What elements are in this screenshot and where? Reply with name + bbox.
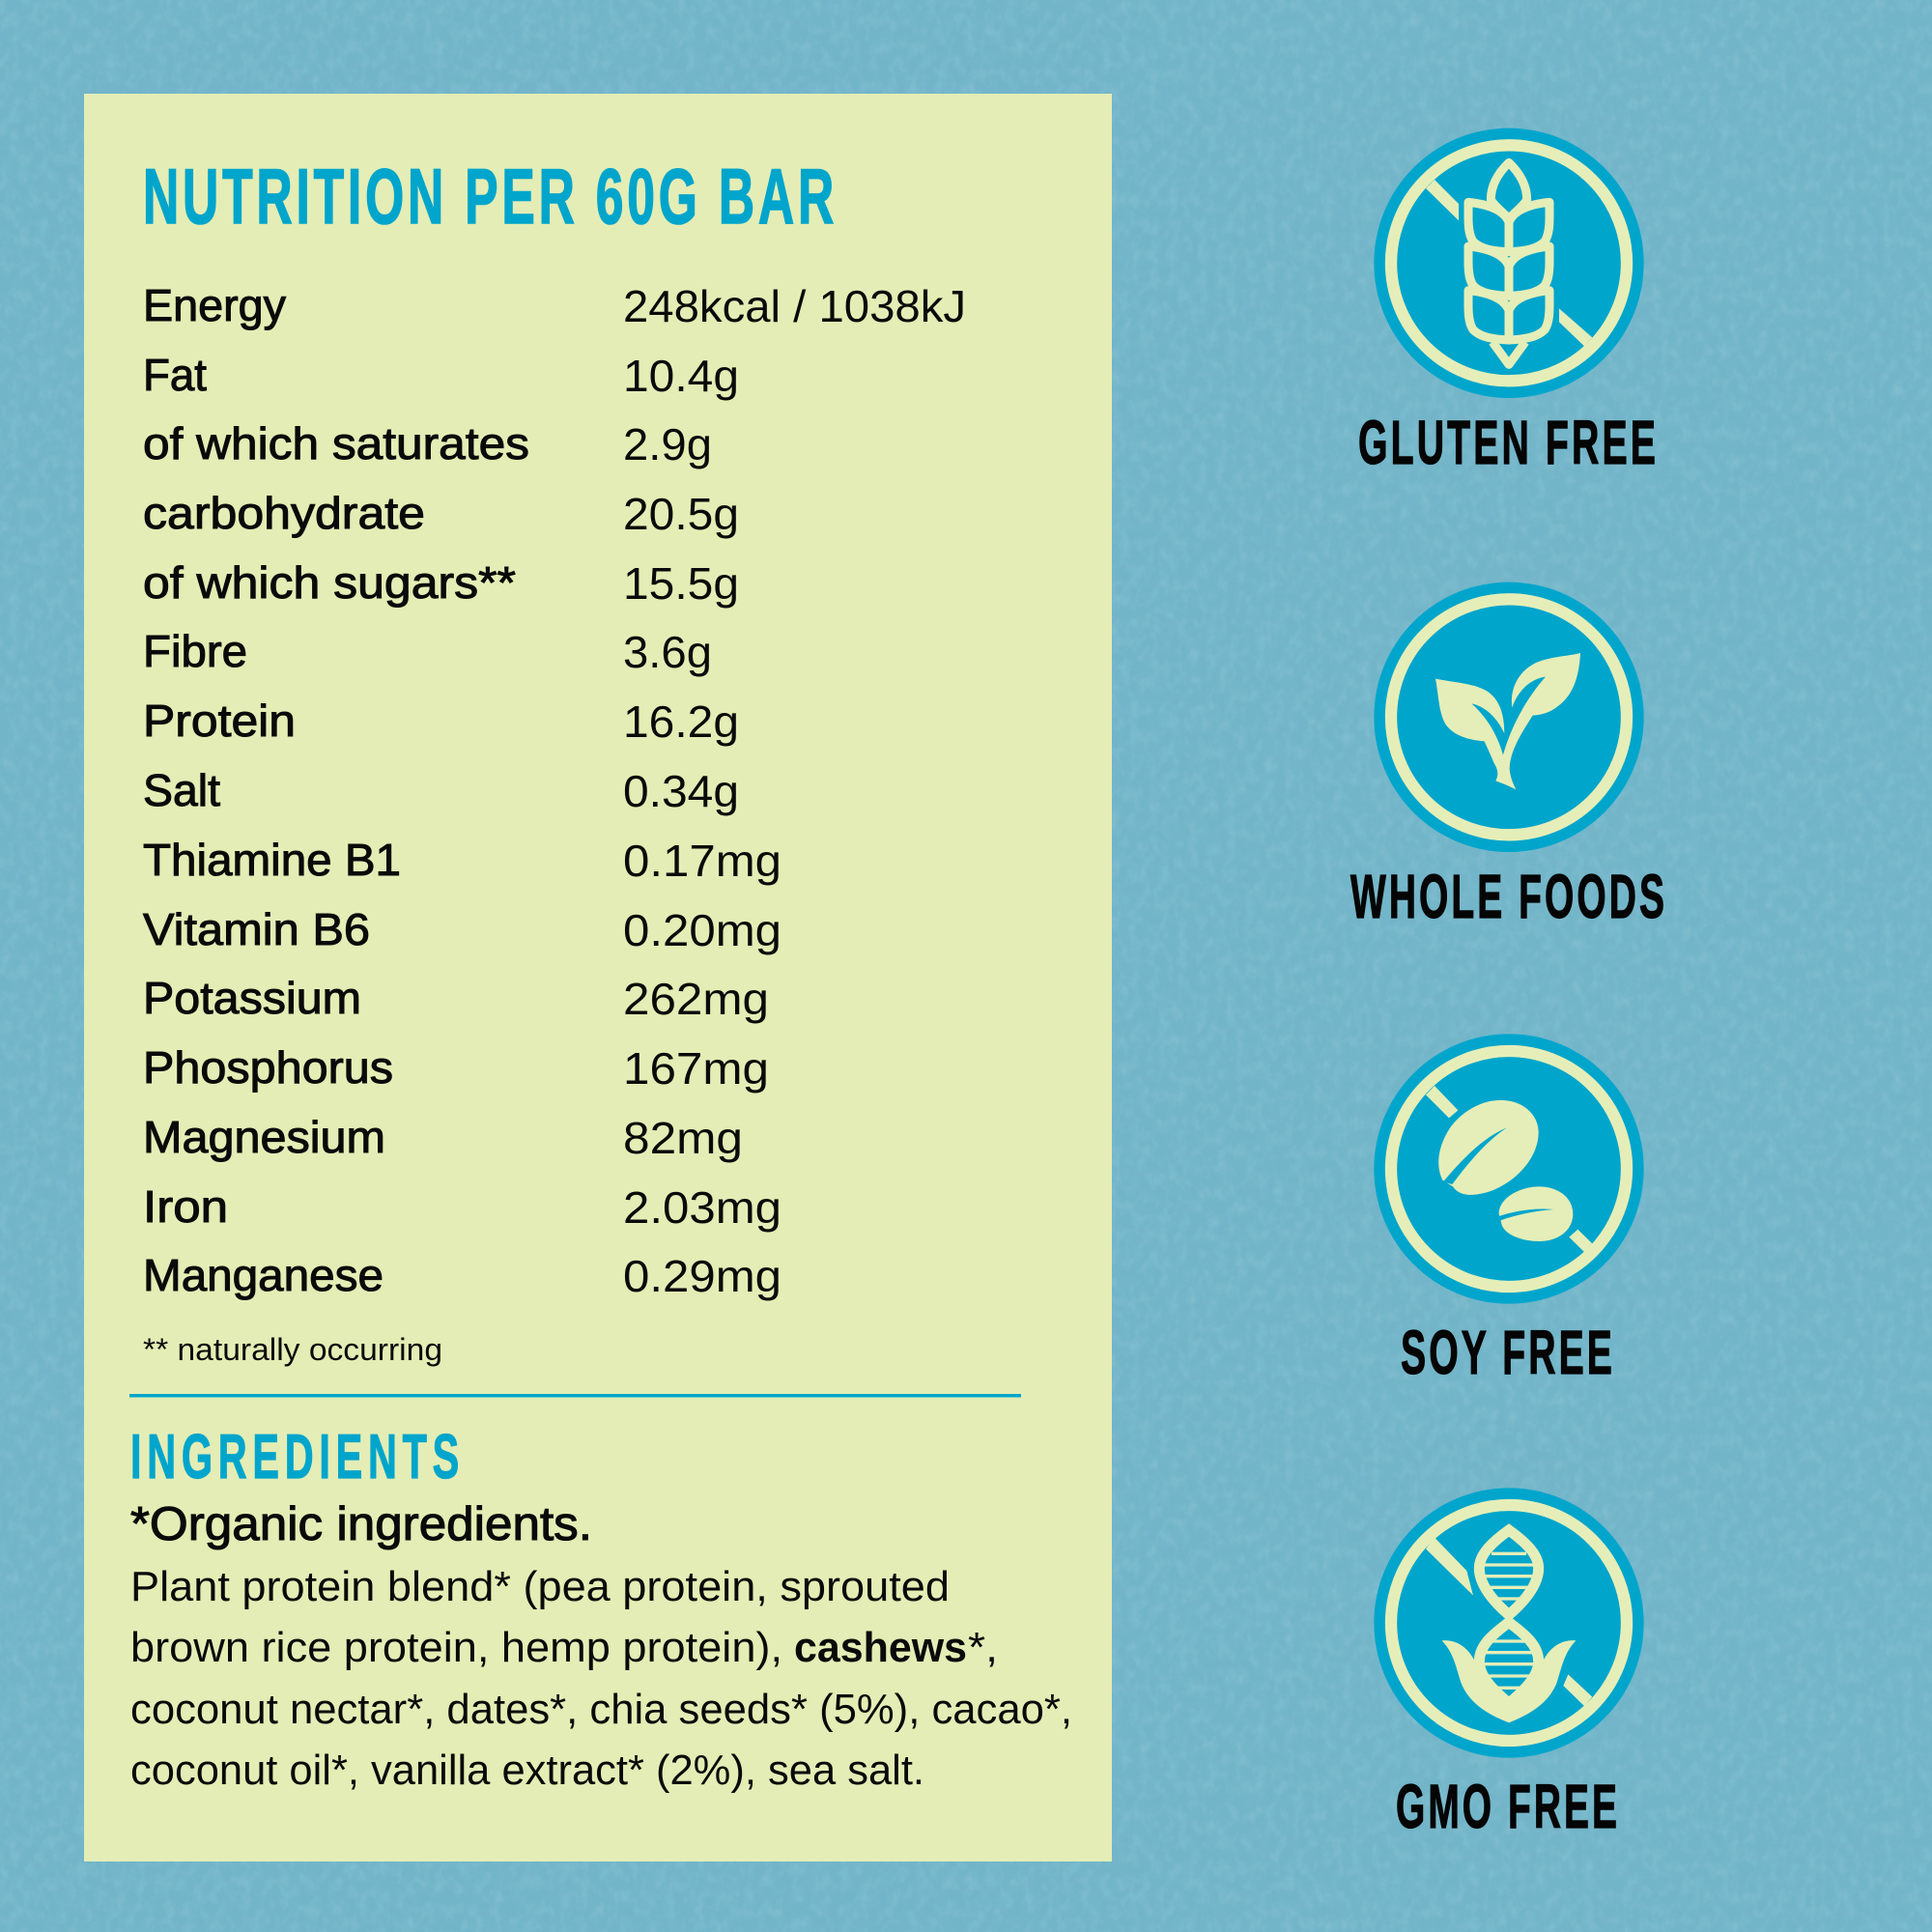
row: sugars: of which sugars** [143, 557, 516, 608]
row: fat: 10.4g [623, 351, 739, 401]
row: protein: 16.2g [623, 696, 739, 747]
row: manganese: 0.29mg [623, 1251, 781, 1301]
badge: soy free [1374, 1034, 1644, 1387]
row: vitamin b6 [143, 904, 781, 955]
text block: ingredients list [130, 1563, 1072, 1794]
row: iron: 2.03mg [623, 1182, 781, 1233]
row: protein [143, 696, 739, 747]
row: thiamine: Thiamine B1 [143, 835, 401, 885]
row: phosphorus: 167mg [623, 1043, 769, 1094]
row: energy [143, 280, 966, 331]
icon: crossed-out wheat [1374, 128, 1644, 398]
badge: whole foods [1350, 582, 1667, 931]
row: carbohydrate: 20.5g [623, 489, 739, 539]
icon: sprouting leaves [1374, 582, 1644, 852]
label: soy free: SOY FREE [1401, 1318, 1615, 1387]
text block: ingredients list: *, [968, 1624, 998, 1671]
table: nutrition values [143, 280, 966, 1301]
icon: crossed-out soy beans [1374, 1034, 1644, 1304]
text block: ingredients list: Plant protein blend* (pea protein, sprouted [130, 1563, 950, 1610]
panel: nutrition and ingredients [84, 94, 1112, 1861]
row: potassium: 262mg [623, 974, 769, 1024]
row: phosphorus [143, 1042, 769, 1094]
icon: crossed-out DNA plant [1374, 1488, 1644, 1758]
row: carbohydrate [143, 488, 739, 539]
row: thiamine: 0.17mg [623, 836, 781, 886]
row: iron [143, 1181, 781, 1233]
label: gmo free: GMO FREE [1396, 1772, 1620, 1841]
row: saturates: of which saturates [143, 418, 529, 469]
row: energy: 248kcal / 1038kJ [623, 281, 966, 331]
row: protein: Protein [143, 696, 296, 746]
heading: nutrition per 60g bar: NUTRITION PER 60G BAR [143, 154, 838, 241]
row: magnesium [143, 1112, 743, 1163]
row: sugars: 15.5g [623, 558, 739, 609]
footnote: ** naturally occurring [143, 1332, 442, 1367]
row: potassium: Potassium [143, 973, 361, 1023]
row: vitamin b6: 0.20mg [623, 905, 781, 955]
row: phosphorus: Phosphorus [143, 1042, 393, 1093]
row: fat: Fat [143, 350, 207, 400]
label: whole foods: WHOLE FOODS [1350, 862, 1667, 931]
badge: gmo free [1374, 1488, 1644, 1841]
row: magnesium: 82mg [623, 1113, 743, 1163]
label: gluten free: GLUTEN FREE [1358, 408, 1659, 477]
row: fibre [143, 626, 712, 677]
row: thiamine [143, 835, 781, 886]
row: manganese [143, 1250, 781, 1301]
row: saturates [143, 418, 712, 469]
row: fat [143, 350, 739, 401]
subheading: organic ingredients: *Organic ingredients. [130, 1498, 592, 1550]
text block: ingredients list: coconut nectar*, dates*, chia seeds* (5%), cacao*, [130, 1686, 1072, 1733]
row: energy: Energy [143, 280, 286, 330]
row: salt: Salt [143, 765, 220, 815]
row: magnesium: Magnesium [143, 1112, 385, 1162]
heading: ingredients: INGREDIENTS [130, 1421, 465, 1492]
text block: ingredients list: coconut oil*, vanilla extract* (2%), sea salt. [130, 1747, 924, 1794]
row: salt [143, 765, 739, 816]
row: iron: Iron [143, 1181, 228, 1232]
row: vitamin b6: Vitamin B6 [143, 904, 370, 954]
row: carbohydrate: carbohydrate [143, 488, 425, 538]
row: potassium [143, 973, 769, 1024]
row: sugars [143, 557, 739, 609]
row: fibre: Fibre [143, 626, 247, 676]
text block: ingredients list: cashews [794, 1624, 967, 1671]
text block: ingredients list: brown rice protein, hemp protein), [130, 1624, 782, 1671]
row: fibre: 3.6g [623, 627, 712, 677]
badge: gluten free [1358, 128, 1659, 477]
row: salt: 0.34g [623, 766, 739, 816]
row: saturates: 2.9g [623, 419, 712, 469]
row: manganese: Manganese [143, 1250, 384, 1300]
